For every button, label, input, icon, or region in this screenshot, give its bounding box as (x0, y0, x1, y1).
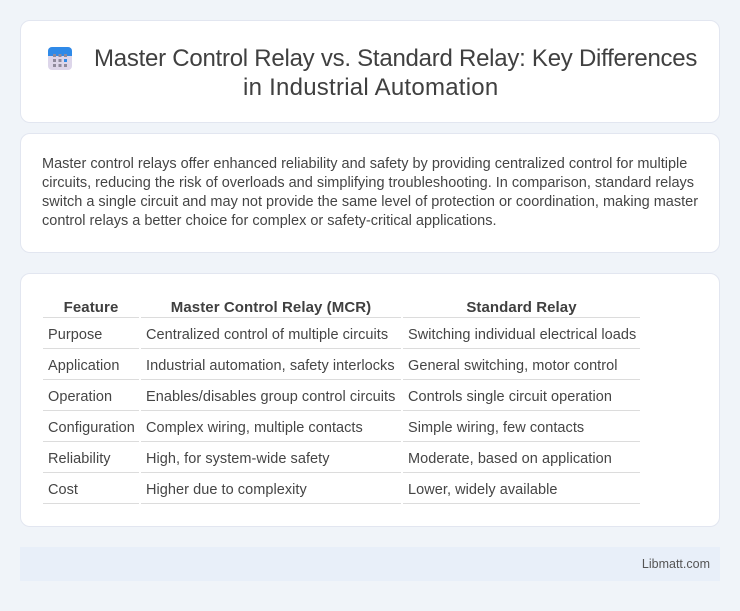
table rows: General switching, motor control (408, 358, 618, 374)
table rows: Controls single circuit operation (408, 389, 612, 405)
panel: summary card (20, 133, 720, 253)
table rows: Industrial automation, safety interlocks (146, 358, 395, 374)
table rows: Simple wiring, few contacts (408, 420, 584, 436)
title: Master Control Relay vs. Standard Relay: Key Differences (94, 45, 697, 72)
table header: Feature (64, 299, 118, 316)
table header: Standard Relay (466, 299, 577, 316)
panel: table card (20, 273, 720, 527)
panel: title card (20, 20, 720, 123)
text block: summary: switch a single circuit and may not provide the same level of protection or coordination, making master (42, 194, 698, 210)
table rows: Purpose (48, 327, 102, 343)
table rows: Higher due to complexity (146, 482, 307, 498)
table rows: Centralized control of multiple circuits (146, 327, 388, 343)
text block: summary: Master control relays offer enhanced reliability and safety by providing centralized control for multiple (42, 156, 687, 172)
table rows: Moderate, based on application (408, 451, 612, 467)
table rows: High, for system-wide safety (146, 451, 330, 467)
title: in Industrial Automation (243, 74, 498, 101)
table rows: Operation (48, 389, 112, 405)
icon: calendar (48, 47, 72, 70)
table rows: Cost (48, 482, 78, 498)
footer text: Libmatt.com (642, 557, 710, 571)
title (94, 45, 697, 101)
text block: summary (42, 156, 698, 229)
table header (43, 299, 640, 318)
footer bar (20, 547, 720, 581)
table rows: Complex wiring, multiple contacts (146, 420, 363, 436)
table rows: Enables/disables group control circuits (146, 389, 395, 405)
table rows: Reliability (48, 451, 111, 467)
table: comparison (43, 299, 640, 504)
table rows: Application (48, 358, 120, 374)
table rows: Lower, widely available (408, 482, 557, 498)
text block: summary: circuits, reducing the risk of overloads and simplifying troubleshooting. In comparison, standard relays (42, 175, 694, 191)
table rows: Switching individual electrical loads (408, 327, 636, 343)
table header: Master Control Relay (MCR) (171, 299, 371, 316)
table rows: Configuration (48, 420, 135, 436)
text block: summary: control relays a better choice for complex or safety-critical applications. (42, 213, 497, 229)
